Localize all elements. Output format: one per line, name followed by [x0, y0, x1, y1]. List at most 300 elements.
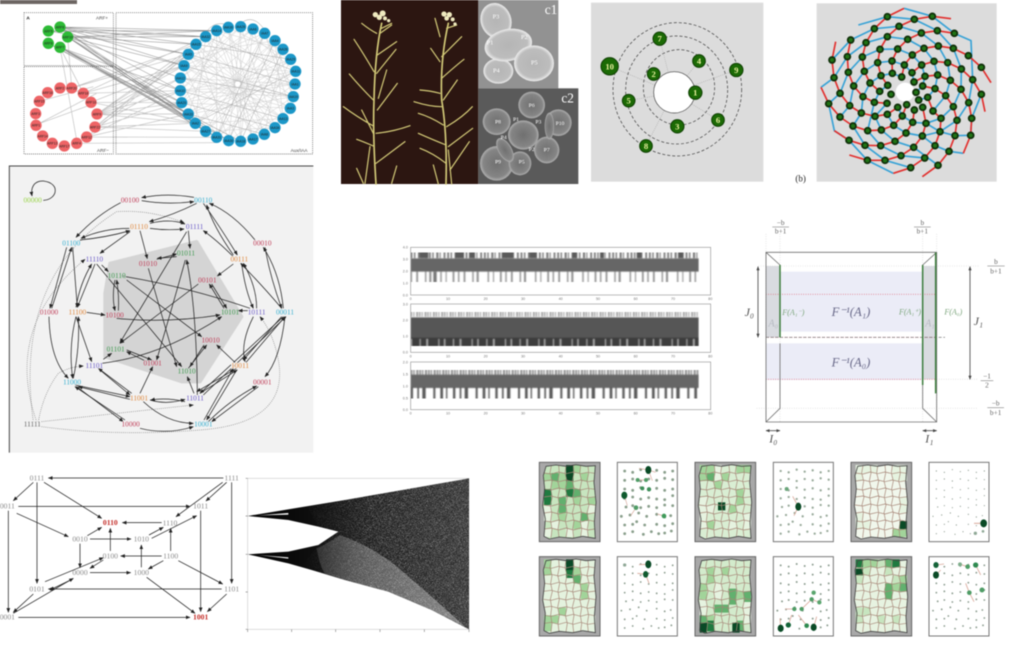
state labels: 11010 — [178, 367, 196, 376]
boundary fractions: −1 — [983, 371, 991, 380]
state labels: 01100 — [62, 238, 81, 247]
c2 labels: c2 — [561, 91, 574, 106]
panel: plant stems photograph — [341, 0, 478, 184]
flower clusters — [373, 10, 457, 26]
main math labels: I₀ — [768, 432, 777, 446]
background dots — [933, 470, 984, 534]
panel letter and group labels: ARF− — [97, 148, 109, 153]
x-axis tick labels: 80 — [708, 354, 712, 358]
cell fills — [854, 559, 908, 633]
frame — [695, 462, 756, 542]
frame — [773, 557, 833, 636]
cell fills — [854, 465, 908, 539]
main math labels: A₀ — [768, 319, 779, 330]
cell fills — [543, 559, 596, 633]
state labels: 11110 — [86, 255, 103, 264]
y-axis tick labels: 2.0 — [403, 319, 408, 323]
shaded cells — [548, 559, 592, 631]
green math labels — [781, 307, 963, 317]
map outline — [766, 252, 937, 422]
c1 background — [478, 0, 558, 88]
caption (b): (b) — [795, 174, 806, 184]
panel: Voronoi tissue map row 2 column 1 — [539, 557, 600, 636]
panel: dot map row 1 column 6 — [929, 462, 989, 542]
x-axis tick labels: 20 — [484, 412, 488, 416]
state labels: 00000 — [24, 196, 42, 205]
node labels: 1111 — [224, 473, 239, 482]
state labels: 10100 — [106, 310, 124, 319]
state labels: 11101 — [85, 361, 104, 370]
primordia numbers: 6 — [716, 115, 721, 125]
state labels: 11100 — [68, 308, 87, 317]
blue Aux/IAA nodes: IAA8 — [261, 133, 268, 137]
node labels: 1011 — [193, 502, 208, 511]
boundary fractions: −b — [777, 218, 785, 227]
red ARF- nodes: ARF16 — [42, 91, 53, 95]
state labels: 01010 — [139, 259, 157, 268]
y-axis tick labels: 3.0 — [403, 303, 408, 307]
node labels: 1000 — [134, 568, 149, 577]
node labels: 1010 — [134, 534, 149, 543]
cell walls — [855, 560, 907, 632]
x-axis tick labels: 10 — [446, 354, 450, 358]
cell walls — [543, 465, 596, 538]
y-axis tick labels: 2.0 — [403, 361, 408, 365]
green ARF+ nodes: ARF6 — [44, 42, 53, 46]
primordia numbers: 1 — [693, 88, 697, 98]
c2 labels: P10 — [556, 121, 565, 127]
node labels: 1001 — [193, 613, 208, 622]
x-axis tick labels — [410, 297, 712, 416]
blue Aux/IAA nodes: IAA2 — [192, 122, 199, 126]
frame — [929, 462, 989, 542]
blue Aux/IAA nodes: IAA16 — [224, 26, 233, 30]
background dots — [933, 564, 984, 629]
node labels — [0, 473, 239, 622]
background dots — [621, 470, 673, 534]
chaotic attractor region — [248, 478, 469, 629]
frame — [773, 462, 833, 542]
main math labels: J₁ — [974, 314, 983, 328]
state labels: 11111 — [24, 420, 41, 429]
node labels: 1101 — [224, 584, 239, 593]
x-axis tick labels: 0 — [410, 297, 412, 301]
axis ticks — [246, 478, 469, 632]
network edges — [36, 20, 296, 143]
panel: dot map row 2 column 6 — [929, 557, 989, 636]
blue parastichies — [821, 8, 981, 173]
red ARF- nodes: ARF9 — [93, 112, 101, 116]
plot frame — [248, 478, 469, 629]
frame — [929, 557, 989, 636]
panel background — [9, 166, 313, 453]
green math labels: F(A₁⁺) — [898, 307, 921, 316]
c1 labels: P1 — [487, 40, 493, 47]
panel: Voronoi tissue map row 2 column 3 — [695, 557, 756, 636]
blue Aux/IAA nodes: IAA9 — [180, 64, 188, 68]
node labels: 0101 — [29, 584, 45, 593]
node labels: 0001 — [0, 613, 15, 622]
y-axis tick labels: 0.0 — [403, 408, 408, 412]
panel letter and group labels: A — [26, 15, 30, 20]
state labels: 10111 — [248, 308, 266, 317]
boundary fractions: b — [920, 218, 924, 227]
node labels: 0010 — [72, 534, 88, 543]
shaded cells — [548, 465, 592, 537]
blue Aux/IAA nodes: IAA20 — [177, 101, 186, 105]
node labels: 0100 — [103, 551, 118, 560]
primordia dots — [829, 16, 981, 168]
c2 labels: P1 — [513, 117, 519, 123]
boundary fractions: b — [994, 257, 998, 266]
arrows — [8, 478, 232, 617]
blue Aux/IAA nodes: IAA31 — [212, 136, 221, 140]
panel: Boolean hypercube state graph — [0, 473, 239, 622]
connector — [974, 522, 984, 525]
cell fills — [698, 559, 752, 633]
blue Aux/IAA nodes: IAA18 — [236, 140, 245, 144]
blue Aux/IAA nodes: IAA27 — [201, 130, 210, 134]
c1 labels — [487, 2, 557, 74]
main math labels: F⁻¹(A₁) — [831, 305, 870, 319]
c2 primordia — [480, 92, 572, 181]
x-axis tick labels: 70 — [671, 297, 675, 301]
primordia numbers: 7 — [658, 34, 663, 44]
x-axis tick labels: 60 — [634, 354, 638, 358]
blue Aux/IAA nodes: IAA5 — [185, 53, 192, 57]
x-axis tick labels: 80 — [708, 297, 712, 301]
narrow windows near the origin — [258, 513, 288, 559]
red dotted levels — [766, 294, 935, 379]
dotted arrows from 11111 — [27, 211, 280, 433]
frame — [539, 557, 600, 636]
state labels: 01001 — [144, 359, 162, 368]
panel: Voronoi tissue map row 1 column 1 — [539, 462, 600, 542]
left plant stem and branches — [343, 23, 410, 184]
shaded cells — [703, 465, 747, 529]
boundary fractions: b+1 — [917, 227, 928, 236]
frame — [851, 462, 912, 542]
red ARF- nodes: ARF15 — [34, 100, 45, 104]
tissue outline — [543, 465, 596, 539]
highlighted dots — [623, 560, 651, 578]
y-axis tick labels: 0.5 — [403, 396, 408, 400]
tissue outline — [854, 465, 908, 539]
cell walls — [855, 465, 907, 538]
c2 labels: P7 — [544, 148, 550, 154]
x-axis tick labels: 10 — [446, 297, 450, 301]
gray background — [817, 3, 997, 182]
panel: state transition graph — [9, 166, 313, 453]
state labels: 10000 — [122, 420, 140, 429]
lighter lower wedge — [317, 535, 465, 627]
state labels: 00011 — [276, 308, 294, 317]
blue Aux/IAA nodes: IAA15 — [191, 43, 201, 47]
y-axis tick labels: 0.0 — [403, 293, 408, 297]
blue Aux/IAA nodes: IAA7 — [261, 32, 268, 36]
c1 labels: P2 — [521, 34, 528, 41]
y-axis tick labels: 1.0 — [403, 335, 408, 339]
panel: c1 micrograph — [475, 0, 578, 184]
cell walls — [699, 465, 751, 538]
dotted guide lines — [757, 234, 978, 422]
panel: dot map row 2 column 4 — [773, 557, 833, 636]
panel: ARF and Aux/IAA interaction network — [24, 13, 313, 154]
blue Aux/IAA nodes: IAA28 — [278, 48, 288, 52]
blue Aux/IAA nodes: IAA11 — [291, 70, 300, 74]
I0 bracket — [766, 429, 780, 432]
boundary fractions: −b — [992, 398, 1000, 407]
state labels: 01000 — [40, 308, 58, 317]
blue Aux/IAA nodes: IAA4 — [271, 39, 279, 43]
state labels: 00010 — [253, 238, 272, 247]
panel: Voronoi tissue map row 1 column 3 — [695, 462, 756, 542]
blue Aux/IAA nodes: IAA34 — [270, 126, 280, 130]
panel frames — [24, 13, 313, 154]
numbered primordia — [601, 32, 743, 152]
red parastichies — [821, 8, 991, 177]
x-axis tick labels: 50 — [596, 354, 600, 358]
highlighted dots — [778, 590, 821, 632]
primordia numbers: 9 — [734, 65, 739, 75]
cell fills — [698, 465, 752, 539]
main math labels: J₀ — [745, 305, 754, 319]
primordia numbers: 3 — [675, 121, 680, 131]
boundary fractions: b+1 — [990, 408, 1002, 417]
y-axis tick labels: 1.0 — [403, 384, 408, 388]
panel: phyllotaxis with ten primordia — [591, 3, 806, 184]
dark dashed level — [766, 336, 945, 338]
state labels: 00110 — [194, 195, 213, 204]
node labels: 0000 — [72, 568, 88, 577]
main math labels — [745, 305, 983, 446]
state labels: 10010 — [202, 336, 220, 345]
blue Aux/IAA nodes: IAA10 — [176, 89, 185, 93]
panel: phyllotaxis lattice with parastichies — [817, 3, 997, 182]
c1 labels: c1 — [545, 2, 557, 17]
x-axis tick labels: 20 — [484, 354, 488, 358]
x-axis tick labels: 50 — [596, 412, 600, 416]
central meristem — [654, 72, 695, 113]
boundary fractions: b+1 — [990, 266, 1002, 275]
state labels: 10110 — [108, 271, 126, 280]
x-axis tick labels: 60 — [634, 297, 638, 301]
panel: Voronoi tissue map row 1 column 5 — [851, 462, 912, 542]
lavender preimage bands — [766, 272, 923, 380]
green math labels: F(A₀) — [943, 307, 963, 316]
blue Aux/IAA nodes: IAA14 — [212, 29, 221, 33]
x-axis tick labels: 0 — [410, 412, 412, 416]
state labels: 11000 — [63, 377, 81, 386]
highlighted dots — [785, 487, 801, 511]
c2 labels: P2 — [529, 147, 535, 153]
red ARF- nodes: ARF20 — [66, 86, 77, 90]
blue Aux/IAA nodes: IAA30 — [224, 139, 233, 143]
state labels: 01011 — [177, 249, 195, 258]
plot 3 data — [411, 370, 699, 398]
x-axis tick labels: 30 — [521, 354, 525, 358]
frame — [695, 557, 756, 636]
primordia numbers: 2 — [652, 69, 656, 79]
panel letter and group labels: Aux/IAA — [291, 148, 308, 153]
frame — [617, 462, 677, 542]
blue Aux/IAA nodes: IAA26 — [236, 25, 245, 29]
background dots — [777, 470, 829, 534]
green math labels: F(A₁⁻) — [781, 308, 805, 317]
blue Aux/IAA nodes: IAA12 — [176, 76, 185, 80]
x-axis tick labels: 20 — [484, 297, 488, 301]
node labels: 1110 — [163, 519, 178, 528]
x-axis tick labels: 40 — [559, 354, 563, 358]
panel letter and group labels — [26, 15, 308, 153]
state labels: 10101 — [221, 308, 239, 317]
panel letter and group labels: ARF+ — [96, 15, 108, 20]
plot 1 data — [411, 253, 699, 282]
c1 primordia — [475, 0, 554, 84]
main math labels: A₁ — [924, 319, 935, 330]
state labels: 01101 — [107, 345, 125, 354]
c2 labels: P4 — [501, 135, 507, 141]
state labels: 11011 — [186, 393, 204, 402]
green ARF+ nodes: ARF5 — [44, 29, 53, 33]
x-axis tick labels: 60 — [634, 412, 638, 416]
state labels: 00111 — [230, 255, 249, 264]
green ARF+ nodes: ARF8 — [56, 25, 64, 29]
frame — [617, 557, 677, 636]
blue Aux/IAA nodes — [175, 21, 301, 147]
main math labels: I₁ — [924, 432, 933, 446]
dashed spiral rings — [613, 23, 742, 156]
tissue outline — [698, 559, 752, 633]
blue Aux/IAA nodes: IAA6 — [249, 27, 257, 31]
connectors — [936, 564, 981, 602]
c1 labels: P3 — [493, 14, 499, 21]
c2 labels — [495, 91, 574, 165]
red ARF- nodes: ARF17 — [59, 144, 70, 148]
x-axis tick labels: 30 — [521, 412, 525, 416]
shaded cells — [859, 559, 903, 623]
x-axis tick labels: 10 — [446, 412, 450, 416]
y-axis tick labels: 2.0 — [403, 270, 408, 274]
highlighted dots — [974, 519, 987, 535]
cell fills — [543, 465, 596, 539]
solid arrows — [32, 181, 286, 431]
shaded cells — [703, 567, 747, 633]
gray background — [591, 3, 763, 182]
red ARF- nodes: ARF22 — [90, 125, 100, 129]
frame — [539, 462, 600, 542]
tissue outline — [854, 559, 908, 633]
red ARF- nodes: ARF12 — [81, 135, 92, 139]
cell walls — [699, 560, 751, 632]
blue Aux/IAA nodes: IAA29 — [286, 58, 295, 62]
red ARF- nodes: ARF18 — [78, 92, 89, 96]
red ARF- nodes: ARF13 — [47, 142, 58, 146]
node labels: 0111 — [30, 473, 45, 482]
blue Aux/IAA nodes: IAA13 — [278, 117, 288, 121]
panel: Voronoi tissue map row 2 column 5 — [851, 557, 912, 636]
connectors — [637, 564, 649, 583]
x-axis tick labels: 70 — [671, 354, 675, 358]
right plant stem and branches — [414, 18, 473, 184]
blue Aux/IAA nodes: IAA33 — [184, 112, 193, 116]
primordia numbers: 4 — [697, 56, 702, 66]
shaded cells — [859, 465, 903, 537]
dark brown photo background — [341, 0, 478, 184]
photo sliver at top edge — [0, 0, 77, 4]
blue Aux/IAA nodes: IAA1 — [291, 82, 299, 86]
connectors — [624, 468, 664, 516]
plot 2 data — [411, 312, 699, 346]
blue Aux/IAA nodes: IAA3 — [287, 107, 294, 111]
frame — [851, 557, 912, 636]
blue Aux/IAA nodes: IAA19 — [289, 95, 298, 99]
x-axis tick labels: 40 — [559, 297, 563, 301]
highlighted dots — [621, 466, 666, 518]
gray side strips — [766, 266, 936, 379]
red ARF- nodes: ARF14 — [37, 134, 48, 138]
connectors — [793, 496, 798, 516]
panel: dot map row 2 column 2 — [617, 557, 677, 636]
green ARF+ nodes: ARF7 — [56, 46, 64, 50]
blue Aux/IAA nodes: IAA32 — [201, 35, 210, 39]
x-axis tick labels: 70 — [671, 412, 675, 416]
node labels: 1100 — [163, 551, 178, 560]
y-axis tick labels: 3.0 — [403, 258, 408, 262]
red ARF- nodes — [30, 82, 103, 152]
panel: interval map diagram — [745, 218, 1005, 446]
primordia numbers — [605, 34, 739, 151]
primordia numbers: 10 — [605, 61, 614, 71]
gray central polygon — [105, 242, 242, 382]
state labels: 01111 — [186, 222, 204, 231]
cell walls — [543, 560, 596, 632]
red ARF- nodes: ARF2 — [56, 86, 64, 90]
J1 bracket — [969, 267, 971, 379]
panel: dot map row 1 column 4 — [773, 462, 833, 542]
y-axis tick labels — [403, 246, 408, 412]
x-axis tick labels: 40 — [559, 412, 563, 416]
main math labels: F⁻¹(A₀) — [831, 356, 870, 370]
panel: dot map row 1 column 2 — [617, 462, 677, 542]
fraction bars — [772, 227, 1005, 408]
c2 labels: P6 — [529, 103, 535, 109]
connectors — [780, 599, 819, 628]
boundary fractions: 2 — [985, 380, 989, 389]
speckle texture — [302, 478, 469, 629]
node labels: 0110 — [103, 518, 118, 527]
green image segments — [780, 252, 936, 393]
white centre — [896, 83, 914, 101]
primordia numbers: 5 — [627, 96, 632, 106]
background dots — [777, 564, 829, 629]
panel: bifurcation diagram — [246, 478, 469, 632]
c1 labels: P4 — [493, 67, 501, 74]
x-axis tick labels: 0 — [410, 354, 412, 358]
red ARF- nodes: ARF10 — [86, 101, 96, 105]
state labels — [24, 195, 294, 429]
green ARF+ nodes: ARF19 — [62, 35, 73, 39]
x-axis tick labels: 50 — [596, 297, 600, 301]
boundary fractions: b+1 — [775, 227, 787, 236]
node labels: 0011 — [0, 502, 15, 511]
c2 labels: P5 — [519, 159, 525, 165]
panel: three time series plots — [403, 246, 712, 416]
y-axis tick labels: 4.0 — [403, 246, 408, 250]
boundary fractions — [775, 218, 1002, 417]
J0 bracket — [757, 267, 759, 337]
state labels: 00101 — [198, 275, 217, 284]
